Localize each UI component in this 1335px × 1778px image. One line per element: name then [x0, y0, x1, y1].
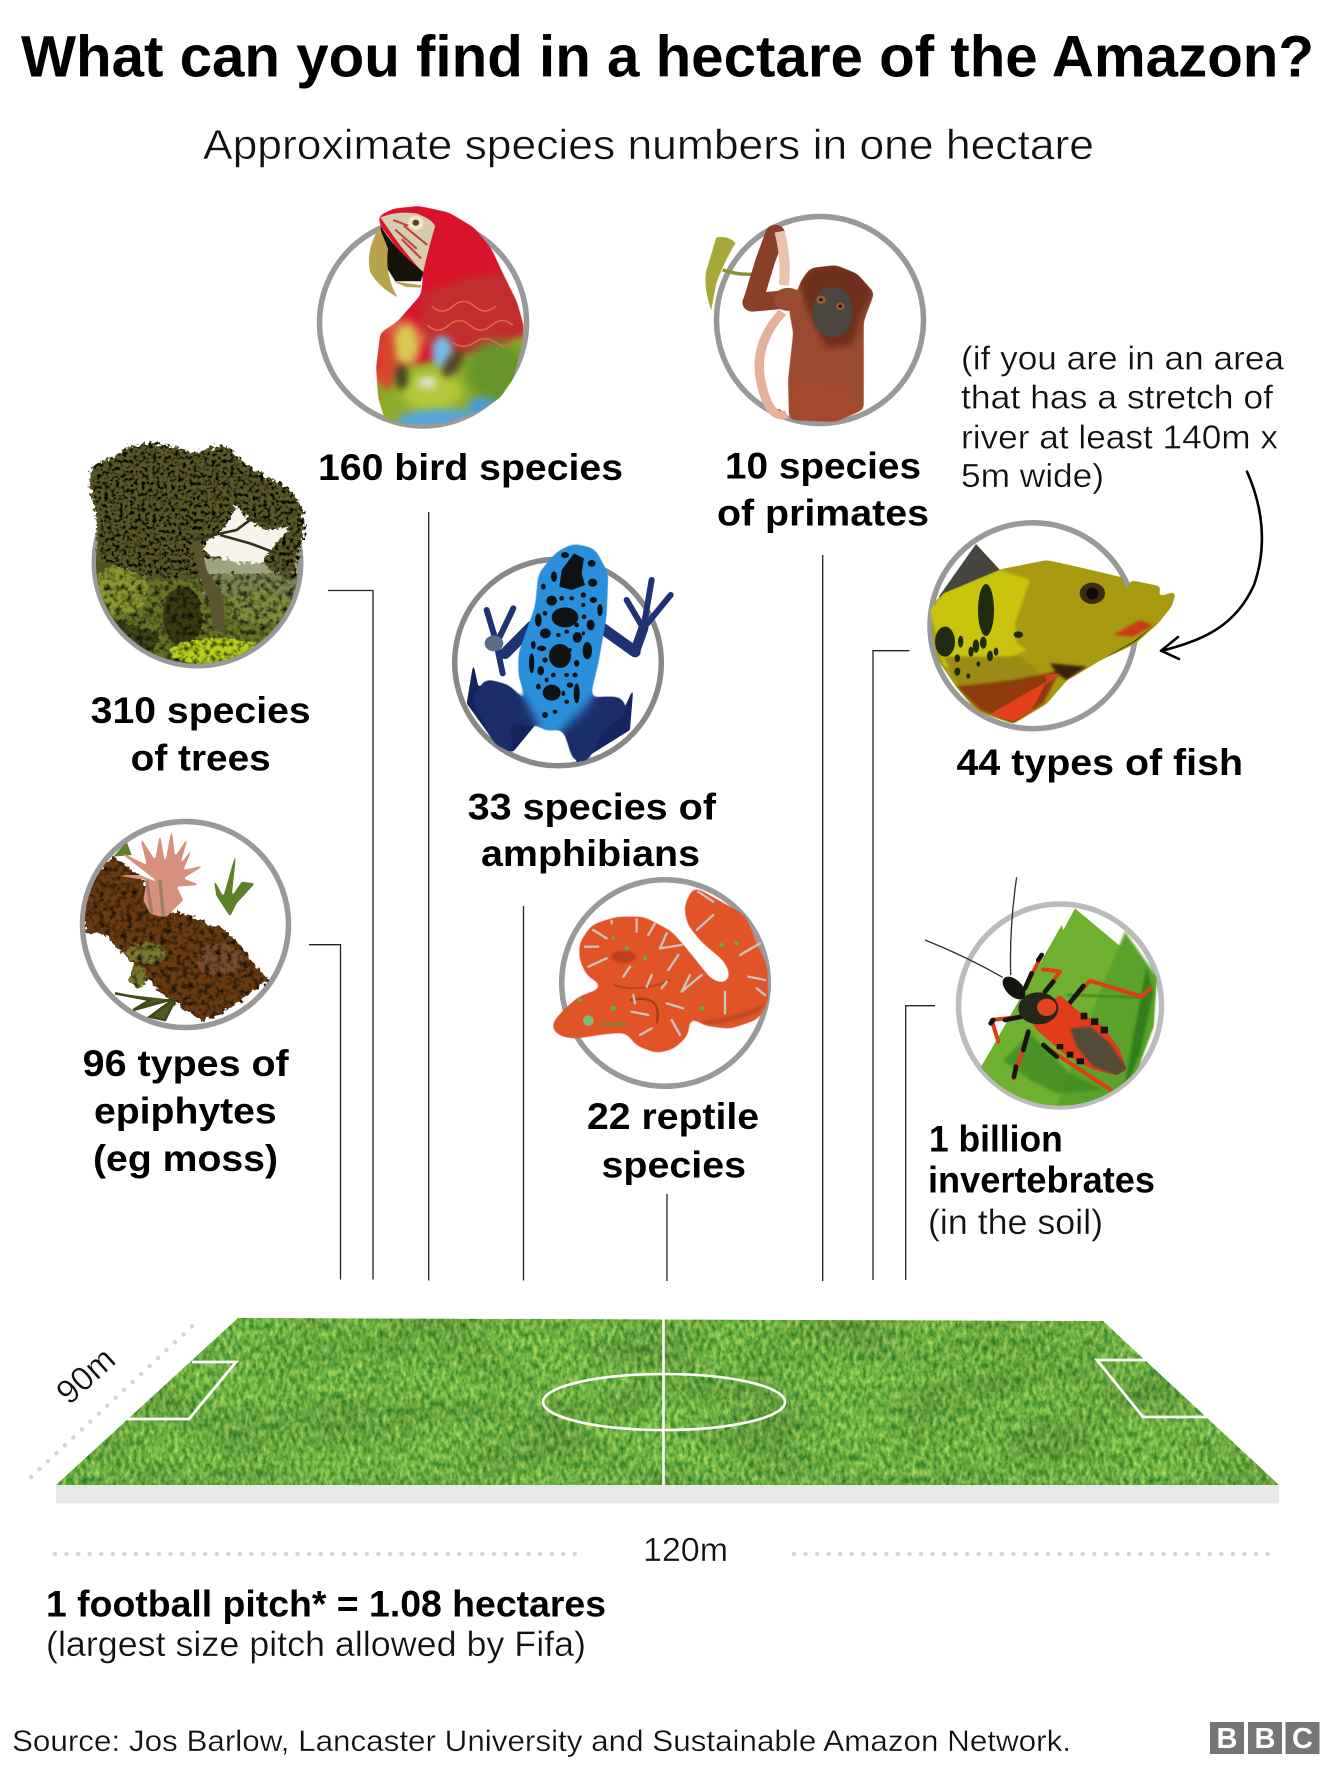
icon: amphibian ring [455, 559, 661, 766]
panel: birds [320, 199, 538, 429]
icon: monkey on vine [705, 232, 874, 422]
label: primates [717, 446, 929, 534]
note: river condition [961, 340, 1284, 495]
icon: macaw parrot [368, 206, 524, 424]
pitch markings [127, 1319, 1207, 1485]
logo: BBC: B [1217, 1723, 1237, 1755]
icon: primate ring [716, 216, 924, 424]
icon: reptile ring [562, 880, 768, 1086]
source: Source: Jos Barlow, Lancaster University and Sustainable Amazon Network. [12, 1725, 1071, 1758]
label: invertebrates [928, 1119, 1155, 1242]
note: river condition: that has a stretch of [961, 380, 1274, 416]
label: epiphytes: 96 types of [83, 1043, 289, 1084]
note: river condition: river at least 140m x [961, 420, 1278, 457]
label: invertebrates: invertebrates [928, 1160, 1155, 1200]
connector lines from each species to the pitch [309, 512, 935, 1281]
icon: moss and bromeliad [83, 828, 268, 1022]
label: amphibians [468, 786, 717, 874]
pectoral fin [990, 682, 1047, 722]
sky gap [203, 505, 290, 563]
label: reptiles [587, 1096, 759, 1186]
label: primates: 10 species [725, 446, 921, 486]
arrow: note to fish [1161, 472, 1262, 659]
panel: epiphytes [82, 822, 288, 1028]
label: trees [91, 690, 311, 779]
label: epiphytes: (eg moss) [93, 1138, 278, 1179]
label: epiphytes [83, 1043, 289, 1179]
grass surface [56, 1318, 1279, 1485]
label: invertebrates: 1 billion [929, 1119, 1063, 1160]
label: primates: of primates [717, 492, 929, 534]
icon: epiphyte ring [82, 822, 288, 1028]
label: amphibians: amphibians [481, 833, 700, 874]
text: pitch size explanation [46, 1584, 606, 1664]
title: What can you find in a hectare of the Amazon? [21, 24, 1314, 90]
snake eye [583, 1015, 594, 1026]
dimension: width 90m [31, 1319, 200, 1477]
panel: amphibians [455, 543, 671, 766]
label: amphibians: 33 species of [468, 786, 717, 828]
icon: fish ring [930, 523, 1136, 729]
label: epiphytes: epiphytes [94, 1091, 277, 1132]
panel: fish [927, 340, 1284, 729]
note: river condition: (if you are in an area [961, 340, 1284, 377]
monkey arm [753, 234, 793, 302]
note: river condition: 5m wide) [961, 458, 1104, 495]
label: reptiles: 22 reptile [587, 1096, 759, 1137]
icon: orange tree snake [551, 886, 768, 1053]
label: fish: 44 types of fish [956, 742, 1243, 783]
panel: primates [705, 216, 924, 424]
panel: invertebrates [925, 877, 1162, 1107]
species labels [83, 446, 1243, 1242]
fish eye [1080, 583, 1105, 604]
icon: bird ring [320, 219, 526, 426]
subtitle: Approximate species numbers in one hectare [203, 121, 1094, 168]
panel: reptiles [551, 880, 768, 1086]
logo: BBC [1210, 1722, 1320, 1755]
icon: invertebrate ring [958, 904, 1162, 1107]
icon: rainforest tree [80, 443, 305, 670]
icon: poison dart frog [467, 543, 671, 763]
icon: assassin bug on leaf [925, 877, 1157, 1107]
icon: tree ring [94, 459, 301, 666]
label: invertebrates: (in the soil) [928, 1203, 1103, 1242]
dimension: length 120m: 120m [643, 1532, 728, 1569]
icon: parrot face [380, 213, 435, 272]
text: pitch size explanation: (largest size pitch allowed by Fifa) [46, 1625, 586, 1664]
pitch base [56, 1485, 1279, 1504]
label: birds: 160 bird species [318, 447, 623, 488]
text: pitch size explanation: 1 football pitch* = 1.08 hectares [46, 1584, 606, 1624]
logo: BBC: C [1292, 1723, 1313, 1755]
logo: BBC: B [1255, 1723, 1275, 1755]
label: trees: 310 species [91, 690, 311, 731]
icon: peacock bass [927, 544, 1177, 724]
panel: trees [80, 443, 305, 670]
label: trees: of trees [131, 738, 271, 779]
dimension: width 90m: 90m [50, 1341, 123, 1412]
label: reptiles: species [602, 1144, 746, 1186]
football pitch [56, 1318, 1279, 1504]
